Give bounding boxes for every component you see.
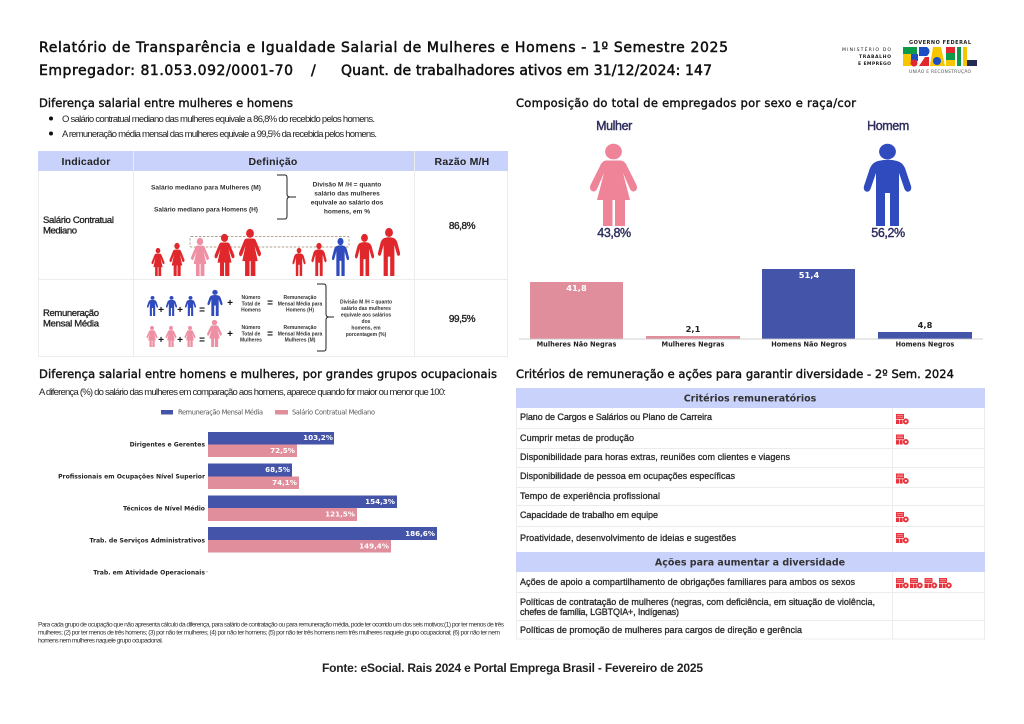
formula: remuneração média: Número [242,295,260,301]
bullet text block: O salário contratual mediano das mulheres equivale a 86,8% do recebido pelos homens. [62,114,375,125]
formula: remuneração média [146,284,392,351]
title: / [311,63,316,79]
formula: remuneração média: + [158,335,164,346]
table rows text [520,412,875,635]
formula: remuneração média: Homens [241,308,261,314]
formula: remuneração média: = [199,305,205,316]
definition text: salário mediano: equivale ao salário dos [311,200,384,206]
formula: remuneração média: Mulheres [240,338,262,344]
table rows text: Proatividade, desenvolvimento de ideias e sugestões [520,533,736,543]
table header: Razão M/H [435,156,489,168]
bar chart: grupos ocupacionais: 68,5% [265,465,290,474]
definition text: salário mediano: Divisão M /H = quanto [313,182,381,188]
header: critérios remuneratórios: Critérios remuneratórios [684,394,817,404]
formula: remuneração média: Total de [242,302,261,308]
icon: mulher: Mulher [596,119,632,133]
heading: diferença salarial: Diferença salarial entre mulheres e homens [39,96,293,110]
bar chart: grupos ocupacionais: Técnicos de Nível Médio [123,504,205,512]
definition text: salário mediano: homens, em % [324,208,370,216]
icon: mulher [590,119,637,240]
bullet text block [49,114,377,140]
bar chart: grupos ocupacionais: 149,4% [359,542,389,550]
table header: Definição [248,156,298,168]
bar chart: grupos ocupacionais: 186,6% [405,529,435,538]
logo: ministério: TRABALHO [859,54,891,60]
formula: remuneração média: Mensal Média para [278,302,322,308]
table rows text: Disponibilidade para horas extras, reuniões com clientes e viagens [520,452,790,462]
formula: remuneração média: + [227,298,233,309]
heading: critérios: Critérios de remuneração e ações para garantir diversidade - 2º Sem. 2024 [516,367,954,381]
formula: remuneração média: = [267,298,273,309]
table rows text: Ações de apoio a compartilhamento de obrigações familiares para ambos os sexos [520,577,856,587]
icon: mulher: 43,8% [597,226,631,240]
ratio: 99,5%: 99,5% [449,314,476,325]
bar chart: sexo e raça: 51,4 [799,270,819,280]
bar chart: sexo e raça: 2,1 [686,324,701,334]
formula: remuneração média: = [267,329,273,340]
row label: remuneração: Mensal Média [43,318,100,330]
icon: homem [864,119,911,240]
formula: remuneração média: Remuneração [283,325,317,331]
icon: homem: Homem [867,119,909,133]
formula: remuneração média: Homens (H) [286,308,314,314]
table rows text: Capacidade de trabalho em equipe [520,510,658,520]
footnote: mulheres; (2) por ter menos de três homens; (3) por não ter mulheres; (4) por não ter homens; (5) por não ter três homens nem três mulheres naquele grupo ocupacional; (6) por não ter nem [38,630,501,636]
table header [61,156,489,168]
logo: governo federal: UNIÃO E RECONSTRUÇÃO [909,68,972,75]
definition text: salário mediano: Salário mediano para Mulheres (M) [151,184,261,192]
icon: homem: 56,2% [871,226,905,240]
bar chart: grupos ocupacionais [58,432,437,576]
formula: remuneração média: + [227,329,233,340]
icons: pessoas em fila [152,228,400,276]
bar chart: grupos ocupacionais: 74,1% [272,478,297,487]
table header: Indicador [61,156,111,168]
row label: remuneração [43,308,100,330]
formula: remuneração média: Divisão M /H = quanto [340,300,392,306]
logo: ministério: MINISTÉRIO DO [842,45,891,53]
formula: remuneração média: Mensal Média para [278,332,322,338]
formula: remuneração média: Mulheres (M) [285,338,316,344]
definition text: salário mediano: salário das mulheres [314,190,380,198]
logo: ministério [842,45,891,67]
legend: Salário Contratual Mediano [292,408,375,416]
row label: salário contratual: Mediano [43,226,77,236]
subtitle text: A diferença (%) do salário das mulheres em comparação aos homens, aparece quando for maior ou menor que 100: [39,387,446,398]
logo: ministério: E EMPREGO [858,61,891,67]
title: Relatório de Transparência e Igualdade Salarial de Mulheres e Homens - 1º Semestre 2025 [39,40,728,56]
bar chart: grupos ocupacionais: 121,5% [325,510,355,518]
legend [161,408,375,416]
bar chart: sexo e raça: Homens Não Negros [771,340,847,348]
table rows text: Cumprir metas de produção [520,433,634,443]
definition text: salário mediano: Salário mediano para Homens (H) [154,206,258,214]
bar chart: sexo e raça: 4,8 [918,320,933,330]
bar chart: sexo e raça: Mulheres Não Negras [537,340,616,348]
table rows text: Políticas de contratação de mulheres (negras, com deficiência, em situação de violência, [520,597,875,607]
formula: remuneração média: + [177,335,183,346]
bar chart: sexo e raça: Homens Negros [896,340,954,348]
panel: critérios e ações [516,388,985,639]
heading: grupos ocupacionais: Diferença salarial entre homens e mulheres, por grandes grupos ocupacionais [39,367,497,381]
table rows text: Plano de Cargos e Salários ou Plano de Carreira [520,412,712,422]
formula: remuneração média: homens, em [351,326,381,332]
formula: remuneração média: salário das mulheres [341,306,391,312]
ratio: 86,8%: 86,8% [449,221,476,232]
bar chart: grupos ocupacionais: Dirigentes e Gerentes [130,442,205,448]
formula: remuneração média: Número [242,325,260,331]
footnote: Para cada grupo de ocupação que não apresenta cálculo da diferença, para salário de contratação ou para remuneração média, pode ter ocorrido um dos seis motivos:(1) por ter menos de três [38,622,505,628]
title: Empregador: 81.053.092/0001-70 [39,63,293,79]
bar chart: grupos ocupacionais: 154,3% [365,497,395,506]
bar chart: grupos ocupacionais: 103,2% [303,433,333,442]
bar chart: grupos ocupacionais: Trab. de Serviços Administrativos [89,538,205,544]
formula: remuneração média: = [199,335,205,346]
table rows text: Tempo de experiência profissional [520,491,660,501]
bar chart: grupos ocupacionais: Trab. em Atividade Operacionais [93,570,205,576]
bar chart: sexo e raça [519,269,983,348]
bar chart: grupos ocupacionais: Profissionais em Ocupações Nível Superior [58,472,205,480]
icons: marcadores [896,414,951,588]
row label: salário contratual: Salário Contratual [43,215,114,226]
row label: remuneração: Remuneração [43,308,99,319]
table rows text: Disponibilidade de pessoa em ocupações específicas [520,471,736,481]
bar chart: sexo e raça: 41,8 [566,283,587,293]
heading: composição: Composição do total de empregados por sexo e raça/cor [516,96,856,110]
bar chart: sexo e raça: Mulheres Negras [662,340,725,348]
row label: salário contratual [43,215,114,236]
header: ações: Ações para aumentar a diversidade [655,558,845,568]
legend: Remuneração Mensal Média [178,408,263,416]
source line: Fonte: eSocial. Rais 2024 e Portal Emprega Brasil - Fevereiro de 2025 [322,661,703,675]
formula: remuneração média: equivale aos salários [341,312,391,318]
definition text: salário mediano [151,175,384,219]
bar chart: grupos ocupacionais: 72,5% [270,446,295,455]
logo: governo federal: GOVERNO FEDERAL [909,40,972,46]
formula: remuneração média: dos [362,319,371,325]
footnote [38,622,505,644]
formula: remuneração média: Remuneração [283,295,317,301]
table rows text: chefes de família, LGBTQIA+, Indígenas) [520,607,679,617]
table rows text: Políticas de promoção de mulheres para cargos de direção e gerência [520,625,802,635]
logo: governo federal [903,40,977,75]
panel: tabela de indicadores [38,151,508,356]
formula: remuneração média: Total de [242,332,261,338]
title: Quant. de trabalhadores ativos em 31/12/2024: 147 [341,63,712,79]
footnote: homens nem mulheres naquele grupo ocupacional. [38,638,163,644]
bullet text block: A remuneração média mensal das mulheres equivale a 99,5% da recebida pelos homens. [62,129,377,140]
title [39,40,728,79]
formula: remuneração média: porcentagem (%) [346,332,387,338]
formula: remuneração média: + [177,305,183,316]
formula: remuneração média: + [158,305,164,316]
